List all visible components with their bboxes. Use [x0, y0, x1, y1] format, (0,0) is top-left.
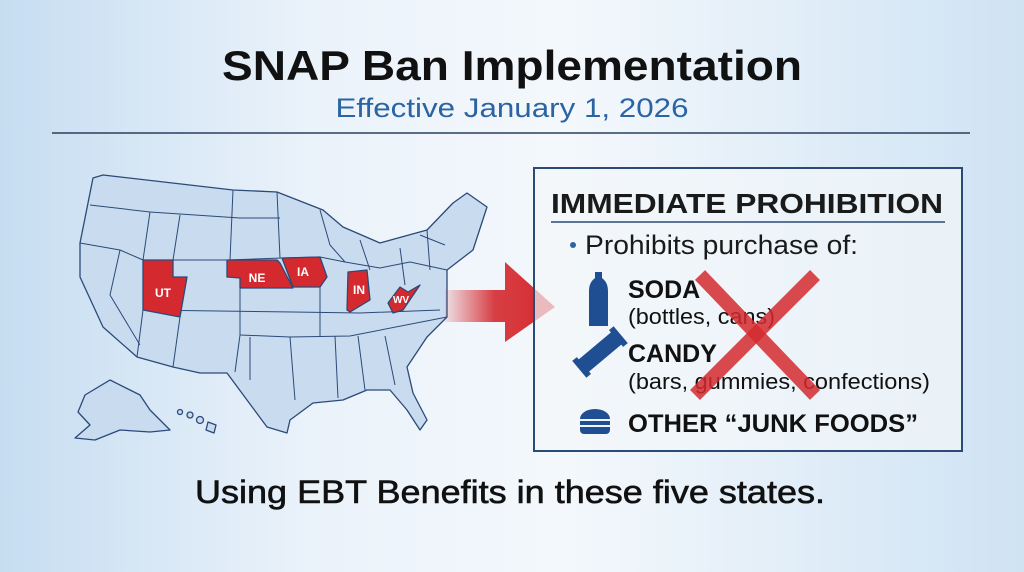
bottom caption: Using EBT Benefits in these five states.: [195, 474, 825, 510]
map labels: WV: [393, 295, 409, 306]
state UT: [143, 260, 187, 317]
panel: immediate prohibition: Prohibits purchase of:: [585, 230, 858, 260]
state IN: [347, 270, 370, 312]
panel: immediate prohibition: [534, 168, 962, 451]
map labels: IA: [297, 265, 309, 279]
icon: soda bottle: [589, 272, 608, 326]
subtitle: Effective January 1, 2026: [336, 93, 688, 123]
map outline: [80, 175, 487, 433]
map labels: [155, 265, 409, 306]
panel: immediate prohibition: (bottles, cans): [628, 304, 775, 329]
red X: [695, 275, 815, 395]
map: Alaska: [75, 380, 170, 440]
map: US states: [75, 175, 487, 440]
panel: immediate prohibition: SODA: [628, 276, 700, 304]
panel: immediate prohibition: (bars, gummies, confections): [628, 369, 930, 394]
map labels: UT: [155, 286, 172, 300]
panel: immediate prohibition: IMMEDIATE PROHIBITION: [551, 188, 943, 219]
icon: burger: [580, 409, 610, 434]
state WV: [388, 285, 420, 313]
map: Hawaii: [178, 410, 216, 433]
map labels: IN: [353, 283, 365, 297]
panel: immediate prohibition: CANDY: [628, 340, 717, 368]
state IA: [282, 257, 327, 287]
state NE: [227, 260, 293, 288]
icon: candy bar: [572, 326, 628, 378]
arrow: [445, 262, 555, 342]
panel: immediate prohibition: OTHER “JUNK FOODS”: [628, 410, 918, 438]
title: SNAP Ban Implementation: [222, 42, 802, 89]
map labels: NE: [249, 271, 265, 285]
